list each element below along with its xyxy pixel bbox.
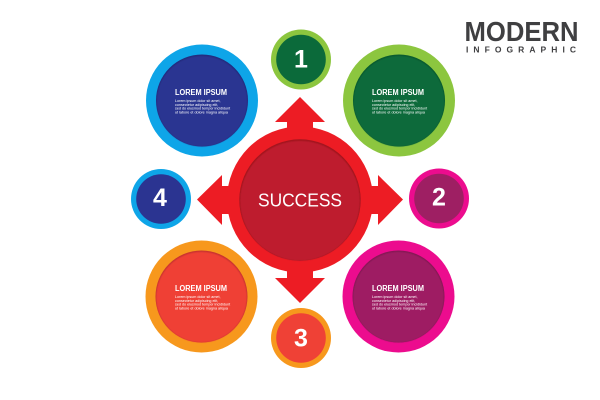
panel: orange text circle: Lorem ipsum dolor sit amet, (175, 295, 220, 299)
panel: pink text circle: consectetur adipiscing elit, (372, 299, 415, 303)
panel: pink text circle: sed do eiusmod tempor incididunt (372, 303, 427, 307)
panel: blue text circle: LOREM IPSUM (175, 87, 227, 97)
panel: orange text circle: sed do eiusmod tempor incididunt (175, 303, 230, 307)
panel: green text circle: ut labore et dolore magna aliqua (372, 110, 426, 114)
hub label: SUCCESS (258, 190, 342, 210)
panel: orange text circle (146, 240, 258, 352)
badge: number 3: 3 (294, 324, 308, 352)
center hub: success with four arrows (197, 97, 403, 303)
panel: orange text circle: consectetur adipiscing elit, (175, 299, 218, 303)
panel: green text circle: sed do eiusmod tempor incididunt (372, 107, 427, 111)
panel: blue text circle: ut labore et dolore magna aliqua (175, 110, 229, 114)
panel: green text circle: LOREM IPSUM (372, 87, 424, 97)
panel: blue text circle: Lorem ipsum dolor sit amet, (175, 99, 220, 103)
panel: blue text circle (146, 44, 258, 156)
panel: pink text circle: LOREM IPSUM (372, 283, 424, 293)
panel: orange text circle: ut labore et dolore magna aliqua (175, 306, 229, 310)
title: MODERN INFOGRAPHIC: INFOGRAPHIC (466, 45, 576, 55)
arrow: left (197, 175, 235, 225)
badge: number 1 (271, 30, 331, 90)
arrow: right (365, 175, 403, 225)
arrow: down (275, 265, 325, 303)
badge: number 1: 1 (294, 46, 308, 74)
hub inner disc (239, 139, 361, 261)
panel: pink text circle: Lorem ipsum dolor sit amet, (372, 295, 418, 299)
badge: number 2 (409, 168, 469, 228)
badge: number 2: 2 (432, 184, 446, 212)
panel: green text circle (343, 44, 455, 156)
badge: number 4: 4 (153, 184, 167, 212)
arrow: up (275, 97, 325, 135)
panel: pink text circle (342, 240, 454, 352)
panel: green text circle: Lorem ipsum dolor sit amet, (372, 99, 418, 103)
panel: blue text circle: consectetur adipiscing elit, (175, 103, 218, 107)
hub ring (227, 126, 373, 272)
title: MODERN INFOGRAPHIC: MODERN (464, 16, 578, 47)
panel: pink text circle: ut labore et dolore magna aliqua (372, 306, 426, 310)
panel: orange text circle: LOREM IPSUM (175, 283, 227, 293)
panel: blue text circle: sed do eiusmod tempor incididunt (175, 107, 230, 111)
badge: number 3 (271, 308, 331, 368)
panel: green text circle: consectetur adipiscing elit, (372, 103, 415, 107)
badge: number 4 (131, 169, 191, 229)
